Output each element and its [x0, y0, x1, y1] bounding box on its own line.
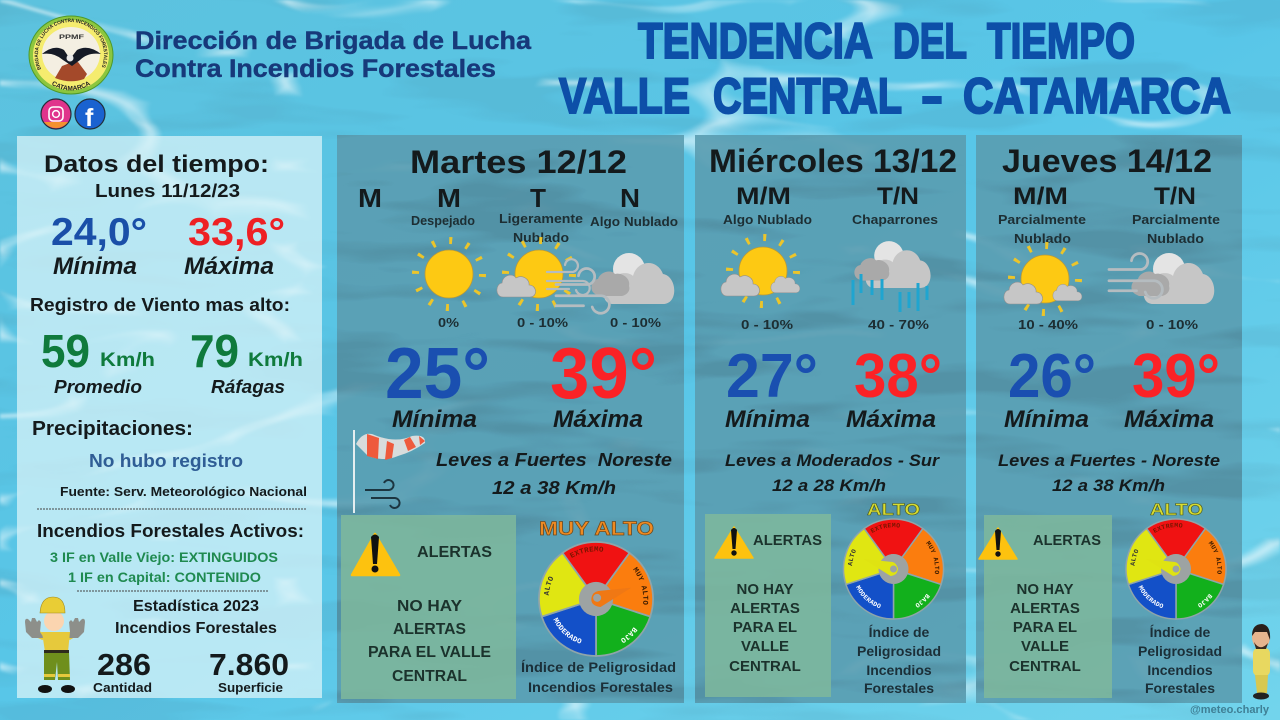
heading: day: Martes 12/12 — [410, 144, 627, 180]
alert message: CENTRAL — [392, 668, 467, 685]
rain chance labels: 10 - 40% — [1018, 317, 1078, 332]
title: DEL — [893, 13, 967, 69]
wind text — [725, 451, 940, 495]
heading: statistics: Incendios Forestales — [115, 620, 277, 637]
gauge label: MUY ALTO — [539, 518, 654, 540]
header: institution logo: CATAMARCA — [52, 82, 90, 90]
gauge: danger index muy alto: EXTREMO — [570, 546, 604, 558]
gauge: danger index alto — [1125, 518, 1227, 620]
rain chance labels: 0 - 10% — [610, 315, 661, 330]
title: CENTRAL — [713, 68, 902, 124]
gauge caption — [857, 624, 941, 696]
wind text: 12 a 38 Km/h — [1052, 476, 1165, 495]
title: TIEMPO — [987, 13, 1135, 69]
icon: night cloud with wind — [1109, 253, 1214, 304]
alert message: NO HAY — [1017, 581, 1073, 598]
icon: warning triangle — [715, 527, 753, 558]
rain chance labels: 0 - 10% — [517, 315, 568, 330]
heading: active fires: Incendios Forestales Activos: — [37, 521, 304, 541]
header: institution name: Dirección de Brigada de Lucha — [135, 27, 532, 55]
period letters — [736, 183, 919, 210]
panel: datos del tiempo (lunes) — [17, 136, 322, 698]
rain chance labels: 0 - 10% — [741, 317, 793, 332]
gauge caption: Índice de — [1150, 624, 1211, 640]
alert message — [729, 581, 801, 675]
stat: superficie: Superficie — [218, 680, 283, 695]
label: maxima: Máxima — [553, 406, 643, 433]
heading: statistics: Estadística 2023 — [133, 598, 259, 615]
panel: martes 12/12 — [337, 135, 684, 703]
alert message: NO HAY — [737, 581, 793, 598]
condition labels — [411, 211, 678, 245]
header: institution logo — [28, 16, 114, 94]
gauge: danger index alto: MODERADO — [1138, 585, 1164, 608]
alert message: ALERTAS — [1010, 600, 1080, 617]
heading: day: Miércoles 13/12 — [709, 143, 957, 179]
title: - — [921, 68, 943, 124]
stat: cantidad — [93, 647, 152, 695]
gauge: danger index alto — [842, 518, 944, 620]
gauge caption: Incendios — [866, 662, 932, 678]
gauge caption — [521, 659, 676, 695]
condition labels: Nublado — [1147, 231, 1204, 246]
gauge caption: Peligrosidad — [1138, 643, 1222, 659]
gauge: danger index alto: BAJO — [916, 594, 930, 608]
stat: cantidad: Cantidad — [93, 680, 152, 695]
icon: partly cloudy — [721, 238, 800, 304]
condition labels: Nublado — [513, 230, 569, 245]
max temperature: 33,6° — [188, 211, 285, 254]
title: CATAMARCA — [963, 68, 1231, 124]
gauge caption: Incendios — [1147, 662, 1213, 678]
panel: miercoles 13/12 — [695, 135, 966, 703]
rain chance labels: 40 - 70% — [868, 317, 929, 332]
header: institution name — [135, 27, 532, 83]
gauge: danger index alto: EXTREMO — [1152, 522, 1182, 533]
rain chance labels: 0% — [438, 315, 459, 330]
active fires list — [50, 549, 278, 585]
average wind: Km/h — [100, 350, 155, 371]
wind text — [998, 451, 1220, 495]
min temperature: 26° — [1008, 342, 1096, 411]
stat: cantidad: 286 — [97, 647, 151, 682]
alert message: CENTRAL — [729, 658, 801, 675]
rain chance labels: 0 - 10% — [1146, 317, 1198, 332]
icon: partly cloudy with wind — [497, 240, 590, 308]
condition labels — [723, 212, 938, 227]
condition labels: Algo Nublado — [723, 212, 812, 227]
rain chance labels — [438, 315, 661, 330]
alert heading: ALERTAS — [1033, 532, 1101, 549]
label: minima: Mínima — [725, 406, 810, 433]
period letters: T/N — [877, 183, 919, 210]
icon: showers — [853, 241, 931, 312]
gust wind: Km/h — [248, 350, 303, 371]
average wind: 59 — [41, 325, 90, 377]
condition labels — [998, 212, 1220, 246]
period letters: T/N — [1154, 183, 1196, 210]
title: TENDENCIA — [638, 13, 873, 69]
source: Fuente: Serv. Meteorológico Nacional — [60, 484, 307, 499]
icon: night cloud with wind — [556, 253, 674, 313]
header: institution logo: PPMF — [59, 35, 84, 41]
icon: facebook — [75, 99, 105, 132]
rain chance labels — [741, 317, 929, 332]
stat: superficie: 7.860 — [209, 647, 289, 682]
title — [559, 13, 1231, 124]
gauge: danger index muy alto: BAJO — [621, 627, 638, 643]
gauge: danger index alto: MODERADO — [856, 585, 881, 608]
gauge: danger index alto: EXTREMO — [870, 522, 900, 533]
period letters — [358, 183, 640, 213]
gauge caption — [1138, 624, 1222, 696]
alert message: NO HAY — [397, 598, 462, 615]
average wind — [41, 325, 155, 377]
max temperature: 38° — [854, 342, 942, 411]
rain chance labels — [1018, 317, 1198, 332]
icon: meteorologist caricature — [1252, 624, 1270, 700]
wind text: 12 a 38 Km/h — [492, 478, 616, 498]
gauge caption: Incendios Forestales — [528, 679, 673, 695]
label: maxima: Máxima — [1124, 406, 1214, 433]
wind text — [436, 450, 672, 498]
gauge: danger index muy alto: ALTO — [544, 576, 553, 596]
credit: @meteo.charly — [1190, 704, 1270, 716]
panel: alerts — [979, 515, 1112, 698]
panel: alerts — [705, 514, 831, 697]
label: maxima: Máxima — [184, 253, 274, 280]
icon: warning triangle — [979, 528, 1017, 559]
period letters: M — [437, 183, 461, 213]
gauge: danger index alto: MUY ALTO — [1208, 540, 1222, 574]
condition labels: Algo Nublado — [590, 214, 678, 229]
label: minima: Mínima — [392, 406, 477, 433]
alert message: VALLE — [741, 638, 789, 655]
gust wind — [190, 325, 303, 377]
label: maxima: Máxima — [846, 406, 936, 433]
alert message — [368, 598, 491, 685]
icon: warning triangle — [352, 534, 399, 575]
period letters: M/M — [736, 183, 791, 210]
heading: precipitaciones: Precipitaciones: — [32, 418, 193, 440]
wind text: Leves a Moderados - Sur — [725, 451, 940, 470]
heading: day: Jueves 14/12 — [1002, 143, 1212, 179]
heading: statistics — [115, 598, 277, 637]
gauge label: ALTO — [1150, 500, 1203, 519]
wind text: 12 a 28 Km/h — [772, 476, 886, 495]
date: Lunes 11/12/23 — [95, 181, 240, 201]
panel: alerts — [341, 515, 516, 699]
gauge: danger index alto: BAJO — [1198, 594, 1212, 608]
min temperature: 27° — [726, 342, 818, 411]
condition labels: Despejado — [411, 213, 475, 228]
alert message: PARA EL — [733, 619, 797, 636]
icon: windsock — [354, 430, 425, 513]
header: institution name: Contra Incendios Forestales — [135, 55, 496, 83]
wind text: Leves a Fuertes Noreste — [436, 450, 672, 470]
icon: instagram — [41, 99, 71, 129]
max temperature: 39° — [1132, 342, 1220, 411]
gauge caption: Peligrosidad — [857, 643, 941, 659]
gauge caption: Forestales — [1145, 680, 1215, 696]
icon: firefighter character — [25, 597, 85, 693]
precipitation value: No hubo registro — [89, 451, 243, 471]
label: minima: Mínima — [53, 253, 137, 280]
gauge: danger index alto: ALTO — [848, 549, 856, 566]
gauge caption: Índice de — [869, 624, 930, 640]
panel: jueves 14/12 — [976, 135, 1242, 703]
gauge: danger index muy alto: MODERADO — [553, 617, 582, 644]
heading: datos del tiempo: Datos del tiempo: — [44, 151, 269, 178]
period letters: N — [620, 183, 640, 213]
gust wind: 79 — [190, 325, 239, 377]
alert message — [1009, 581, 1081, 675]
gauge: danger index muy alto: MUY ALTO — [633, 566, 648, 605]
condition labels: Ligeramente — [499, 211, 583, 226]
alert heading: ALERTAS — [417, 544, 492, 561]
icon: sunny — [416, 240, 482, 308]
condition labels: Parcialmente — [1132, 212, 1220, 227]
heading: wind record: Registro de Viento mas alto: — [30, 295, 290, 315]
gauge caption: Índice de Peligrosidad — [521, 659, 676, 675]
gauge: danger index alto: ALTO — [1130, 549, 1138, 566]
condition labels: Chaparrones — [852, 212, 938, 227]
alert message: ALERTAS — [730, 600, 800, 617]
gauge: danger index muy alto — [538, 541, 654, 657]
condition labels: Nublado — [1014, 231, 1071, 246]
active fires list: 3 IF en Valle Viejo: EXTINGUIDOS — [50, 549, 278, 565]
active fires list: 1 IF en Capital: CONTENIDO — [68, 569, 261, 585]
title: VALLE — [559, 68, 690, 124]
icon: wind — [365, 480, 400, 508]
gauge label: ALTO — [867, 500, 920, 519]
label: minima: Mínima — [1004, 406, 1089, 433]
min temperature: 25° — [385, 334, 490, 414]
gauge caption: Forestales — [864, 680, 934, 696]
icon: partly cloudy — [1004, 246, 1082, 312]
alert message: PARA EL VALLE — [368, 644, 491, 661]
alert message: CENTRAL — [1009, 658, 1081, 675]
label: rafagas: Ráfagas — [211, 377, 285, 397]
period letters — [1013, 183, 1196, 210]
icon: facebook: f — [85, 104, 94, 132]
header: institution logo: BRIGADA DE LUCHA CONTRA INCENDIOS FORESTALES — [34, 18, 108, 70]
min temperature: 24,0° — [51, 211, 147, 254]
period letters: M — [358, 183, 382, 213]
gauge: danger index alto: MUY ALTO — [926, 540, 940, 574]
alert message: ALERTAS — [393, 621, 466, 638]
condition labels: Parcialmente — [998, 212, 1086, 227]
wind text: Leves a Fuertes - Noreste — [998, 451, 1220, 470]
alert message: PARA EL — [1013, 619, 1077, 636]
max temperature: 39° — [550, 334, 657, 414]
alert heading: ALERTAS — [753, 532, 822, 549]
alert message: VALLE — [1021, 638, 1069, 655]
period letters: M/M — [1013, 183, 1068, 210]
period letters: T — [530, 183, 546, 213]
label: promedio: Promedio — [54, 377, 142, 397]
